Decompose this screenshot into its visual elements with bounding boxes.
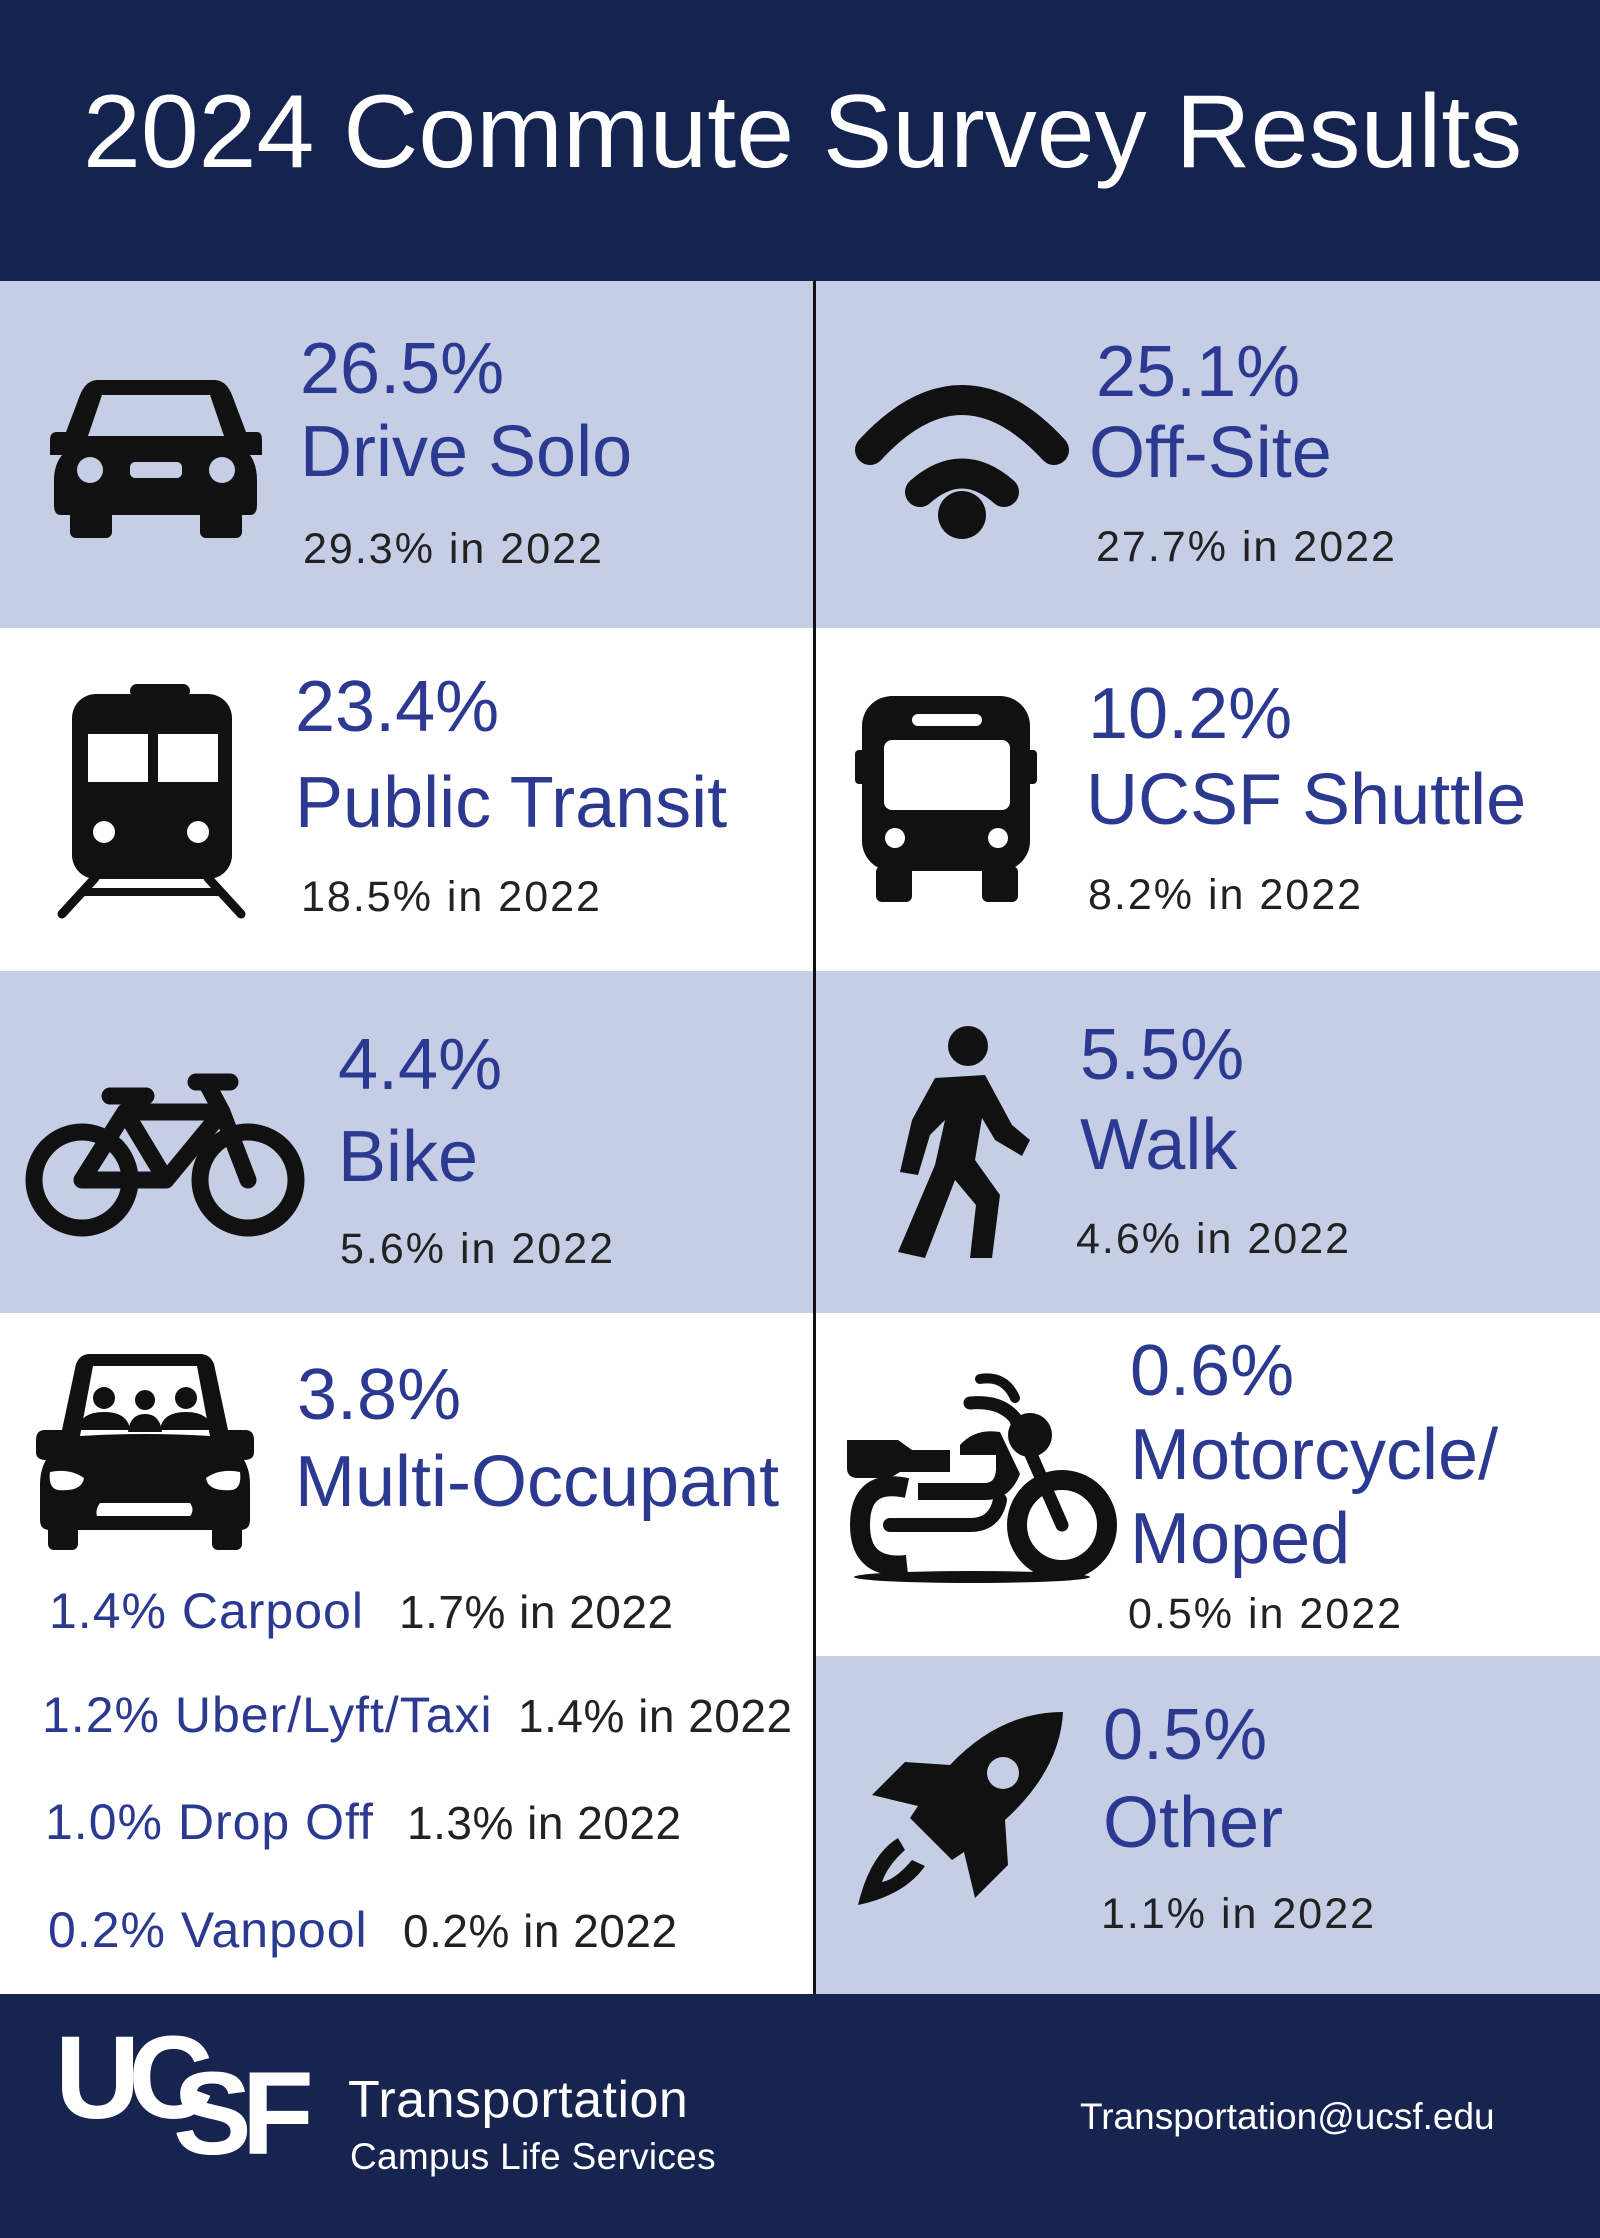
icon: wifi [870,400,1054,539]
panel: drive solo: 29.3% in 2022 [303,525,604,573]
icon: motorcycle [847,1378,1107,1583]
breakdown list: 1.4% in 2022 [518,1690,793,1742]
footer [0,1994,1600,2238]
breakdown list: 1.4% Carpool [49,1583,364,1639]
panel: other: Other [1103,1783,1283,1863]
icon: bus [855,696,1037,902]
panel: bike [338,1025,615,1273]
panel: walk: Walk [1080,1105,1237,1185]
panel: motorcycle: 0.5% in 2022 [1128,1590,1403,1638]
panel: walk: 4.6% in 2022 [1076,1215,1351,1263]
breakdown list: 1.3% in 2022 [407,1797,682,1849]
breakdown list: 1.0% Drop Off [45,1794,374,1850]
panel: walk [1076,1015,1351,1263]
logo: UCSF [55,2012,310,2180]
panel: off-site: 27.7% in 2022 [1096,523,1397,571]
panel: multi-occupant [295,1355,779,1522]
panel: motorcycle [1128,1331,1498,1638]
panel: public transit: 18.5% in 2022 [301,873,602,921]
icon: train [62,684,241,914]
panel: bike: Bike [338,1117,478,1197]
panel: drive solo: Drive Solo [300,412,632,492]
panel: multi-occupant: 3.8% [297,1355,461,1435]
breakdown list: 0.2% Vanpool [48,1902,368,1958]
panel: public transit [295,667,727,921]
panel: other: 0.5% [1103,1695,1267,1775]
breakdown list: 0.2% in 2022 [403,1905,678,1957]
email: Transportation@ucsf.edu [1080,2096,1495,2137]
icon: multi-occupant car [36,1354,254,1550]
panel: motorcycle: Moped [1130,1499,1350,1579]
panel: drive solo: 26.5% [300,329,504,409]
panel: public transit: Public Transit [295,763,727,843]
logo: UCSF: UC [55,2012,201,2144]
icon: bike [34,1082,296,1228]
breakdown list [42,1583,793,1958]
icon: rocket [858,1712,1063,1905]
background bands [0,281,1600,628]
breakdown list: 1.7% in 2022 [399,1586,674,1638]
icon: car [50,380,262,538]
panel: ucsf shuttle [1086,674,1526,919]
panel: multi-occupant: Multi-Occupant [295,1442,779,1522]
panel: drive solo [300,329,632,573]
panel: ucsf shuttle: 10.2% [1088,674,1292,754]
footer: Campus Life Services [350,2136,716,2177]
panel: other [1101,1695,1376,1938]
title: 2024 Commute Survey Results [83,74,1522,190]
logo: UCSF: SF [173,2048,304,2180]
panel: off-site: Off-Site [1089,413,1332,493]
footer text: Transportation [348,2071,688,2129]
icon: walker [898,1026,1030,1258]
panel: ucsf shuttle: 8.2% in 2022 [1088,871,1363,919]
panel: public transit: 23.4% [295,667,499,747]
panel: motorcycle: 0.6% [1130,1331,1294,1411]
panel: other: 1.1% in 2022 [1101,1890,1376,1938]
panel: bike: 4.4% [338,1025,502,1105]
panel: ucsf shuttle: UCSF Shuttle [1086,760,1526,840]
panel: off-site [1089,332,1397,571]
header banner [0,0,1600,281]
panel: walk: 5.5% [1080,1015,1244,1095]
panel: off-site: 25.1% [1096,332,1300,412]
panel: motorcycle: Motorcycle/ [1130,1415,1498,1495]
breakdown list: 1.2% Uber/Lyft/Taxi [42,1687,493,1743]
panel: bike: 5.6% in 2022 [340,1225,615,1273]
